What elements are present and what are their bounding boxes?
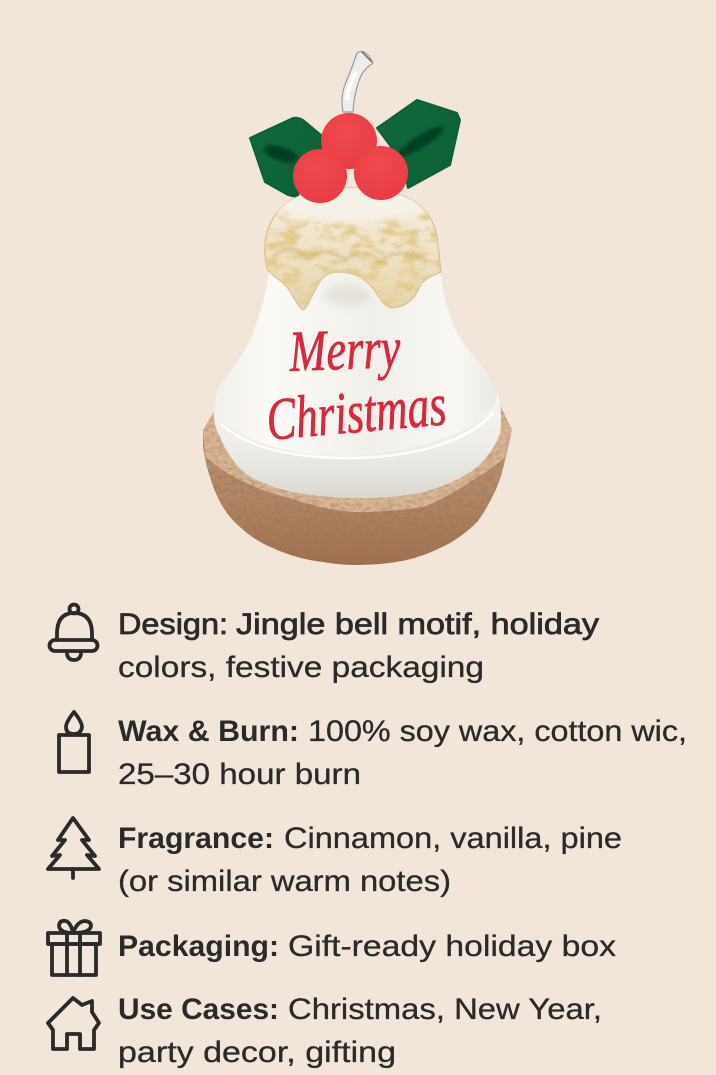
holly leaf right bbox=[377, 100, 460, 188]
text: fragrance: Cinnamon, vanilla, pine bbox=[284, 822, 622, 855]
text: fragrance bbox=[118, 822, 622, 898]
icon: candle bbox=[59, 712, 89, 772]
feature: use cases bbox=[48, 993, 602, 1069]
icon: pine tree bbox=[48, 818, 99, 878]
icon: house bbox=[48, 998, 99, 1049]
text: fragrance: Fragrance: bbox=[118, 822, 274, 855]
berries bbox=[293, 113, 408, 203]
text: wax and burn: Wax & Burn: bbox=[118, 715, 299, 748]
text: wax and burn: 25–30 hour burn bbox=[118, 758, 361, 791]
text: use cases: Christmas, New Year, bbox=[288, 993, 602, 1026]
text: packaging: Packaging: bbox=[118, 930, 279, 963]
text: fragrance: (or similar warm notes) bbox=[118, 865, 451, 898]
icon: gift box bbox=[48, 921, 100, 975]
feature: fragrance bbox=[48, 818, 622, 898]
text: use cases bbox=[118, 993, 602, 1069]
feature: wax and burn bbox=[59, 712, 687, 791]
text: packaging: Gift-ready holiday box bbox=[288, 930, 616, 963]
text: use cases: Use Cases: bbox=[118, 993, 279, 1026]
icon: bell bbox=[50, 604, 98, 660]
text: design: Jingle bell motif, holiday bbox=[236, 608, 599, 641]
text: design: colors, festive packaging bbox=[118, 651, 484, 684]
text: design bbox=[118, 608, 599, 684]
Merry Christmas lettering: Merry bbox=[287, 315, 402, 384]
text: packaging bbox=[118, 930, 616, 963]
cork base bbox=[203, 405, 512, 565]
feature: packaging bbox=[48, 921, 616, 975]
gold marbled wax cap bbox=[265, 183, 441, 310]
text: wax and burn bbox=[118, 715, 687, 791]
text: use cases: party decor, gifting bbox=[118, 1036, 396, 1069]
holly leaf left bbox=[250, 118, 321, 197]
text: design: Design: bbox=[118, 608, 228, 641]
Merry Christmas lettering bbox=[264, 315, 449, 453]
candle product illustration bbox=[203, 51, 512, 565]
feature: design bbox=[50, 604, 599, 684]
text: wax and burn: 100% soy wax, cotton wic, bbox=[308, 715, 687, 748]
Merry Christmas lettering: Christmas bbox=[264, 371, 449, 453]
wick bbox=[342, 51, 373, 112]
bell body bbox=[214, 265, 501, 498]
